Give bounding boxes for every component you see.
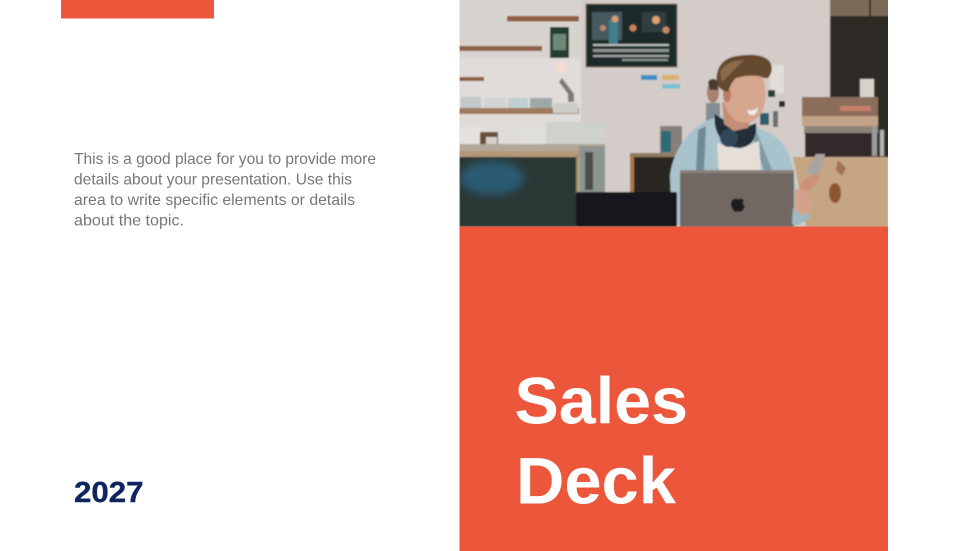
menu stand: [459, 127, 483, 151]
wood counter: [793, 157, 888, 227]
espresso machine: [860, 79, 874, 97]
laptop: silver: [680, 170, 794, 227]
title: Deck: [516, 444, 676, 518]
neck: [722, 102, 752, 131]
dark rear wall panel: [830, 0, 890, 16]
wall labels: [641, 75, 657, 80]
shelf items: [461, 97, 578, 113]
rear counter: [632, 156, 676, 194]
hand and phone: [806, 154, 825, 180]
wooden shelves: [459, 16, 579, 114]
year label: 2027: [74, 477, 144, 509]
black laptop: [576, 192, 677, 227]
photo: man with laptop in a cafe: [455, 0, 895, 235]
description text: [74, 151, 376, 230]
top accent bar: [61, 0, 214, 18]
counter side: [578, 146, 606, 194]
counter front: [459, 157, 577, 227]
glass display: [546, 122, 582, 144]
ear: [723, 88, 731, 102]
hair: [717, 55, 772, 92]
lamp and plant: [556, 62, 566, 74]
counter top: [459, 144, 605, 153]
t-shirt: [717, 141, 761, 173]
green poster: [550, 27, 569, 58]
description text: area to write specific elements or details: [74, 192, 355, 209]
menu blackboard: [586, 4, 677, 67]
title: Sales: [514, 364, 688, 438]
apple logo: [731, 199, 745, 212]
description text: about the topic.: [74, 212, 184, 230]
orange title panel: [460, 226, 888, 551]
background equipment behind man: [770, 65, 784, 93]
title: [514, 364, 688, 518]
wall: [455, 0, 895, 235]
face: [722, 74, 766, 123]
coworker behind: [707, 81, 719, 103]
headphones: [714, 114, 756, 148]
description text: This is a good place for you to provide more: [74, 151, 376, 168]
description text: details about your presentation. Use this: [74, 172, 352, 188]
shirt: [670, 115, 800, 225]
mouth: [747, 107, 758, 115]
forearm: [794, 188, 812, 216]
